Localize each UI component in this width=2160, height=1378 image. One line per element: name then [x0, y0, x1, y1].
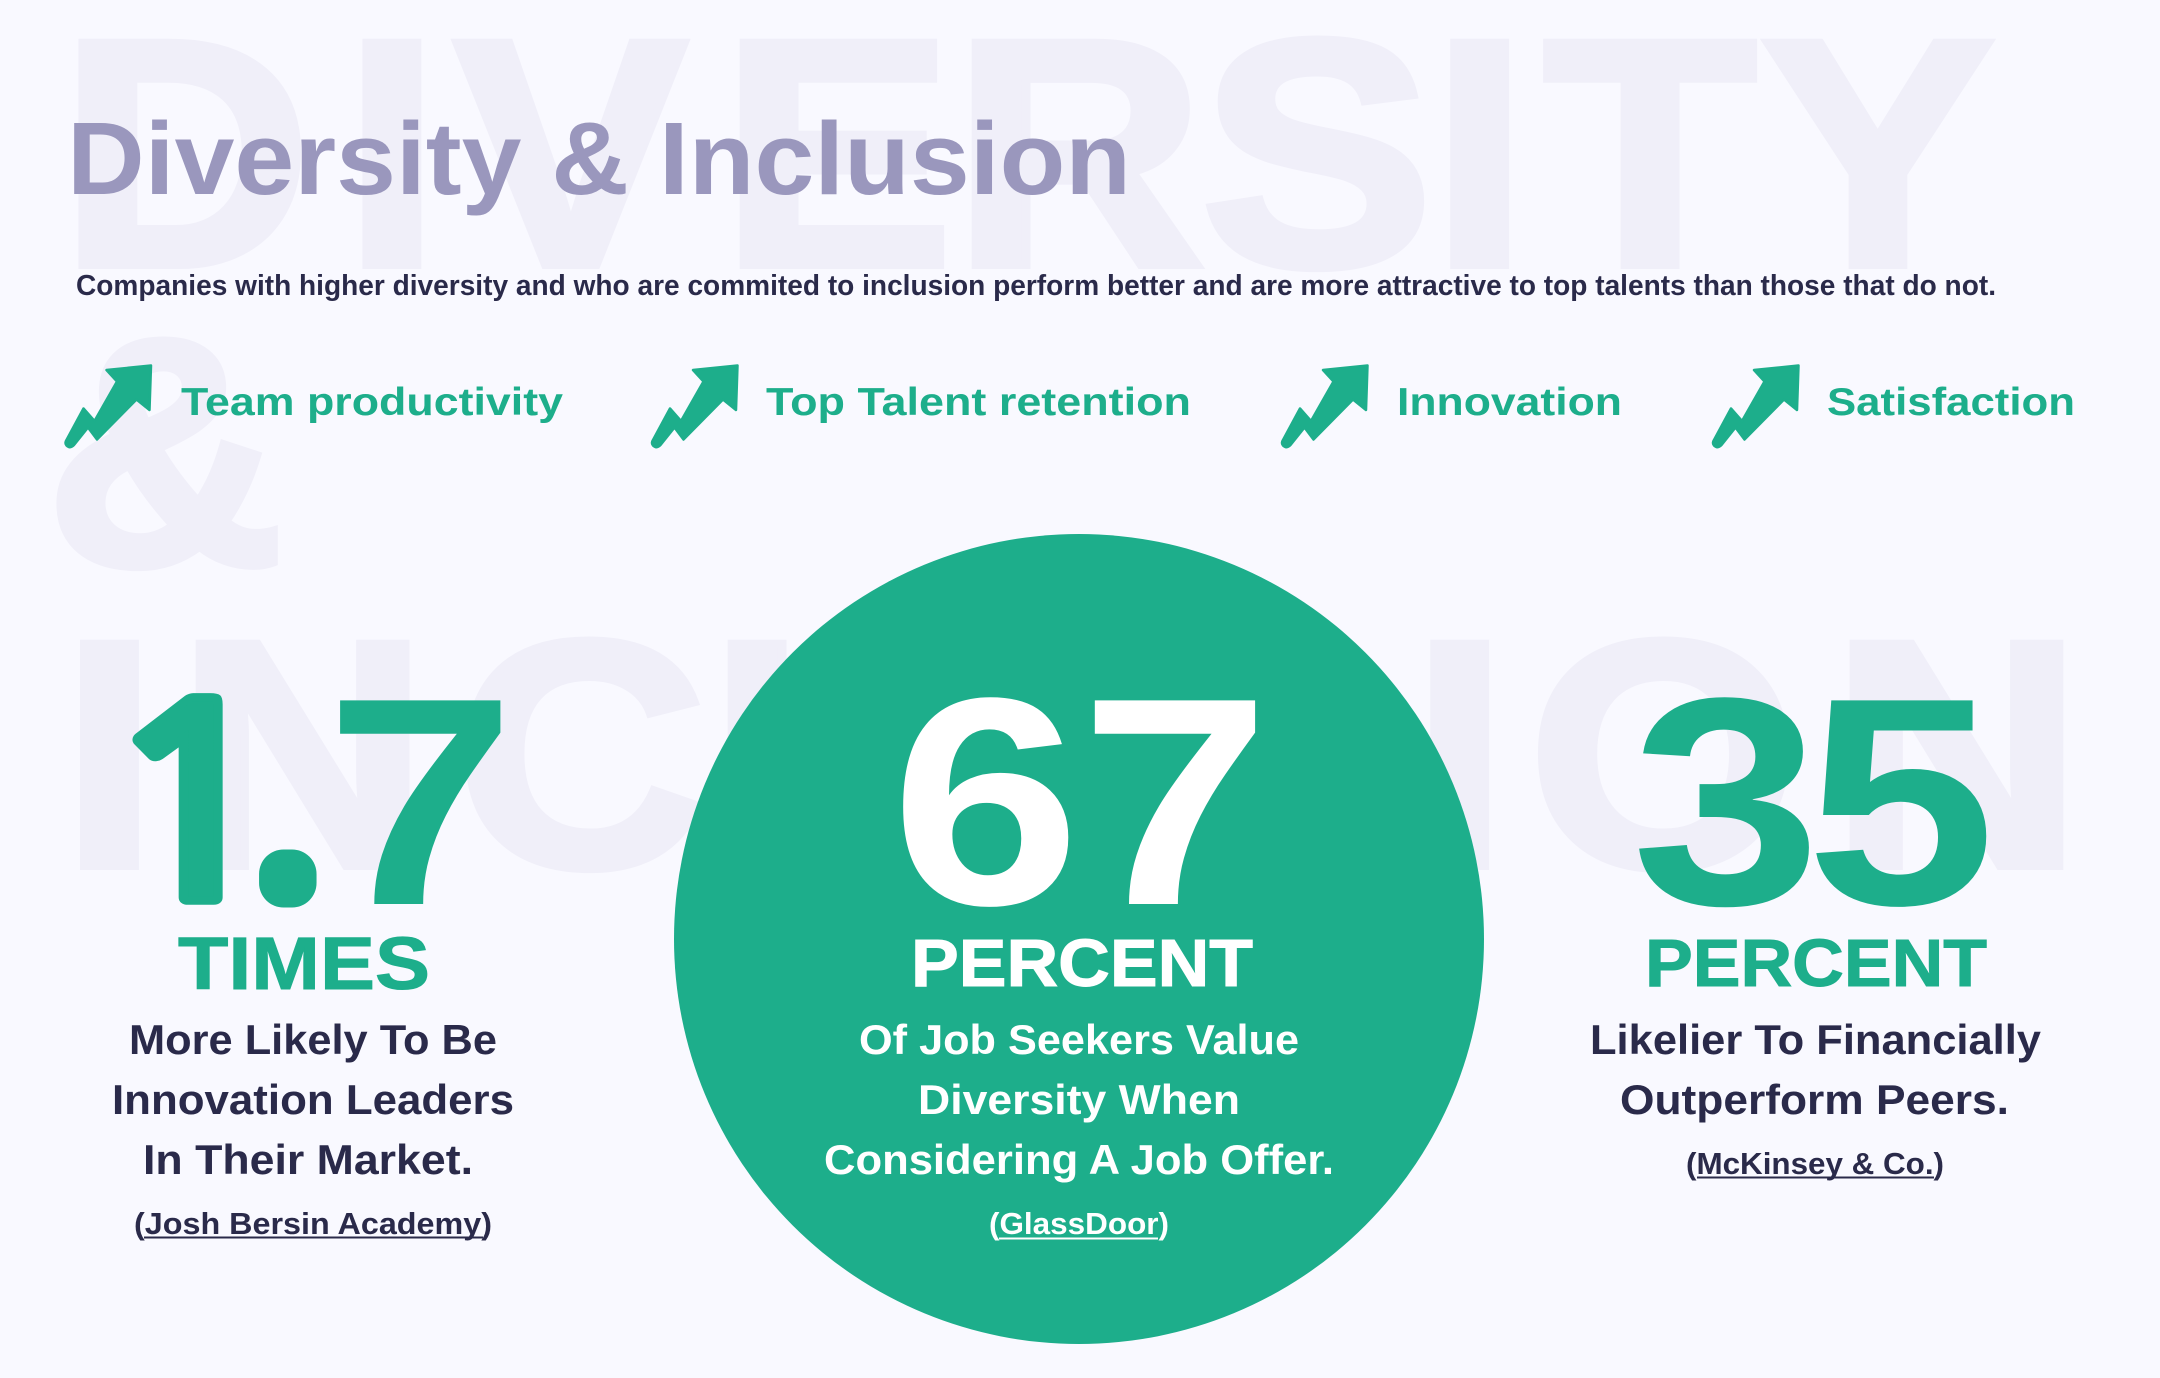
icon: up trend arrow — [1282, 366, 1368, 447]
icon: up trend arrow — [66, 366, 151, 447]
green circle — [674, 534, 1484, 1344]
stat panel: 67 percent circle — [674, 534, 1484, 1344]
description: Of Job Seekers Value — [859, 1016, 1299, 1063]
big number 35: 35 — [1631, 636, 1996, 967]
description: Likelier To Financially — [1590, 1016, 2042, 1063]
description: More Likely To Be — [129, 1016, 497, 1063]
benefit: satisfaction — [1713, 366, 2075, 447]
title: Diversity & Inclusion — [67, 101, 1131, 216]
description: Outperform Peers. — [1620, 1076, 2009, 1123]
big number 67: 67 — [891, 636, 1270, 967]
source: GlassDoor: (GlassDoor) — [989, 1206, 1169, 1241]
subtitle text: Companies with higher diversity and who are commited to inclusion perform better and are more attractive to top talents than those that do not. — [76, 270, 1996, 302]
icon: up trend arrow — [652, 366, 738, 447]
description: Considering A Job Offer. — [824, 1136, 1334, 1183]
icon: up trend arrow — [1713, 366, 1798, 447]
description — [112, 1016, 514, 1183]
source: McKinsey and Co: (McKinsey & Co.) — [1686, 1146, 1944, 1181]
source: Josh Bersin Academy: (Josh Bersin Academy) — [134, 1206, 492, 1241]
big number 1.7 — [96, 636, 515, 967]
background watermark: INCLUSION: INCLUSION — [61, 575, 2083, 935]
benefit: innovation — [1282, 366, 1622, 447]
unit: percent: PERCENT — [1645, 926, 1987, 1001]
stat panel: 35 percent — [1590, 636, 2042, 1181]
big number 1.7: . — [280, 829, 296, 896]
label: innovation: Innovation — [1397, 381, 1622, 424]
unit: times: TIMES — [178, 922, 430, 1005]
label: team productivity: Team productivity — [181, 381, 563, 424]
description — [824, 1016, 1334, 1183]
benefit: team productivity — [66, 366, 563, 447]
stat panel: 1.7 times — [96, 636, 515, 1241]
description: Innovation Leaders — [112, 1076, 514, 1123]
label: satisfaction: Satisfaction — [1827, 381, 2075, 424]
big number 1.7: 1 — [96, 675, 291, 941]
description: Diversity When — [918, 1076, 1240, 1123]
unit: percent: PERCENT — [911, 926, 1253, 1001]
benefit: top talent retention — [652, 366, 1191, 447]
description: In Their Market. — [143, 1136, 473, 1183]
background watermark: ampersand: & — [46, 273, 284, 633]
description — [1590, 1016, 2042, 1123]
big number 1.7: 7 — [325, 636, 515, 967]
label: top talent retention: Top Talent retention — [766, 381, 1191, 424]
